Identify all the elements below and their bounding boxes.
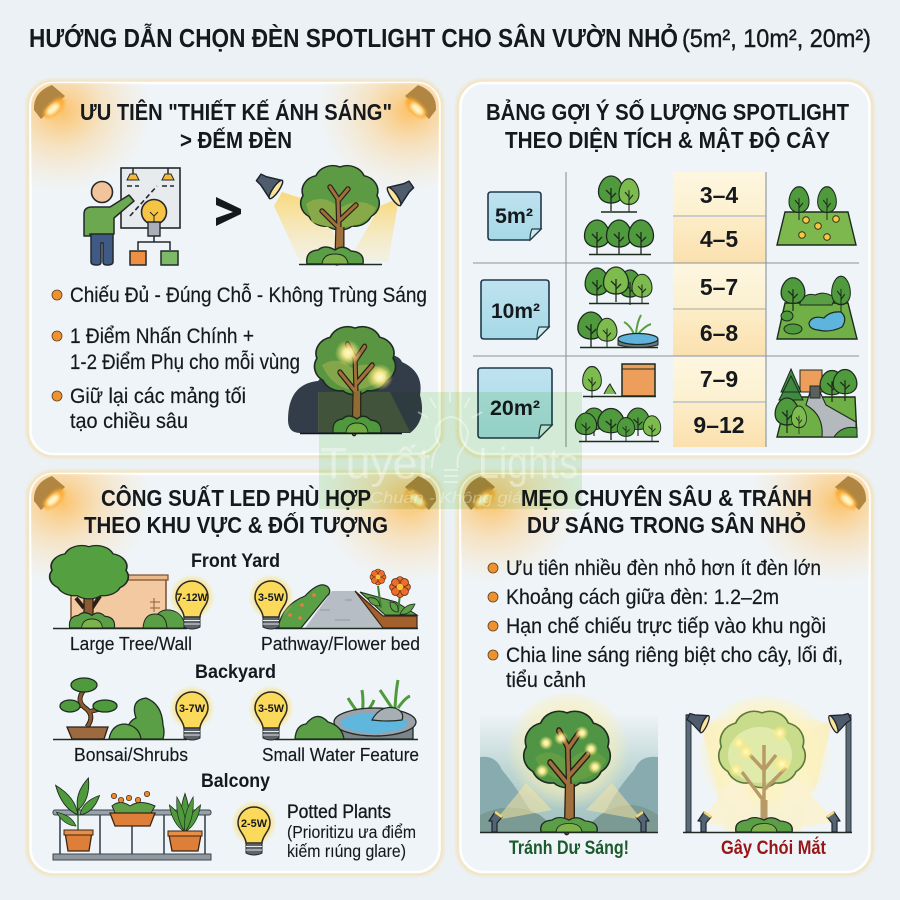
corner spotlights	[31, 474, 439, 574]
scene: bonsai and shrubs	[53, 678, 215, 765]
scene: balcony potted plants	[52, 777, 211, 860]
title: HƯỚNG DẪN CHỌN ĐÈN SPOTLIGHT CHO SÂN VƯỜN NHỎ	[29, 23, 678, 53]
quantity column: 4–5	[700, 226, 738, 252]
icon: tree lit by two spotlights	[252, 166, 418, 264]
bulb and note: potted plants: kiếm rıúng glare)	[287, 841, 406, 861]
scene: large tree and wall	[50, 546, 215, 654]
label: balcony: Balcony	[201, 771, 270, 792]
title: (5m², 10m², 20m²)	[682, 25, 871, 53]
illustration: glare	[683, 696, 854, 859]
quantity column: 7–9	[700, 366, 738, 392]
tree density icons: 10 m2	[578, 267, 658, 348]
bullet: accent points: 1 Điểm Nhấn Chính +	[70, 324, 254, 348]
illustration: avoid excess light: Tránh Dư Sáng!	[509, 838, 629, 859]
heading	[80, 98, 392, 153]
panel: lighting design priority	[24, 78, 446, 460]
panel: spotlight quantity table	[458, 81, 872, 456]
heading: CÔNG SUẤT LED PHÙ HỢP	[101, 484, 371, 511]
watermark: Tuyết Lights	[319, 392, 582, 509]
watermark: Tuyết Lights: Chuẩn - Không giá	[370, 489, 522, 507]
area card 10 m2	[481, 280, 549, 339]
bulb and note: potted plants: Potted Plants	[287, 802, 391, 823]
bulb and note: potted plants: (Prioritizu ưa điểm	[287, 822, 416, 842]
quantity column	[673, 172, 766, 447]
bulb and note: potted plants: 2-5W	[241, 818, 268, 830]
lawn scene: 20 m2	[775, 369, 857, 437]
label: front yard: Front Yard	[191, 551, 280, 572]
watermark: Tuyết Lights: Lights	[478, 439, 578, 488]
area card 20 m2	[478, 368, 552, 438]
bullet: accent points	[52, 324, 300, 374]
scene: bonsai and shrubs: 3-7W	[179, 703, 206, 715]
area card 5 m2	[488, 192, 541, 240]
heading	[84, 484, 388, 538]
tips list: Chia line sáng riêng biệt cho cây, lối đi,	[506, 643, 843, 667]
scene: large tree and wall: 7-12W	[176, 592, 208, 604]
bullet: dark areas	[52, 384, 246, 433]
scene: large tree and wall: Large Tree/Wall	[70, 633, 192, 654]
lawn scene: 5 m2	[777, 187, 856, 245]
panel: expert tips	[454, 468, 876, 878]
heading: > ĐẾM ĐÈN	[180, 126, 292, 153]
scene: pathway and flower bed: Pathway/Flower bed	[261, 633, 420, 654]
scene: small water feature	[248, 680, 419, 765]
illustration: glare: Gây Chói Mắt	[721, 837, 827, 859]
illustration: avoid excess light	[480, 693, 658, 859]
watermark: Tuyết Lights: Tuyết	[320, 439, 430, 488]
heading	[486, 97, 850, 153]
tips list	[488, 556, 843, 692]
scene: small water feature: Small Water Feature	[262, 744, 419, 765]
heading: MẸO CHUYÊN SÂU & TRÁNH	[521, 484, 812, 511]
greater-than sign	[216, 197, 241, 226]
corner spotlights	[461, 474, 869, 574]
heading	[521, 484, 812, 538]
quantity column: 9–12	[693, 412, 745, 438]
area card 10 m2: 10m²	[491, 300, 540, 323]
heading: BẢNG GỢI Ý SỐ LƯỢNG SPOTLIGHT	[486, 97, 850, 125]
icon: person planning light at board	[84, 168, 180, 265]
scene: bonsai and shrubs: Bonsai/Shrubs	[74, 744, 188, 765]
heading: DƯ SÁNG TRONG SÂN NHỎ	[527, 510, 806, 538]
scene: pathway and flower bed: 3-5W	[258, 592, 285, 604]
heading: ƯU TIÊN "THIẾT KẾ ÁNH SÁNG"	[80, 98, 392, 125]
bullet: accent points: 1-2 Điểm Phụ cho mỗi vùng	[70, 349, 300, 374]
panel: LED wattage	[24, 468, 446, 878]
bullet: dark areas: tạo chiều sâu	[70, 409, 188, 433]
bullet: dark areas: Giữ lại các mảng tối	[70, 384, 246, 408]
tips list: tiểu cảnh	[506, 668, 586, 692]
scene: small water feature: 3-5W	[258, 703, 285, 715]
lawn scene: 10 m2	[777, 276, 857, 339]
corner spotlights	[31, 83, 439, 184]
tips list: Hạn chế chiếu trực tiếp vào khu ngồi	[506, 614, 826, 638]
tree density icons: 20 m2	[575, 364, 661, 442]
bulb and note: potted plants	[231, 800, 416, 861]
heading: THEO KHU VỰC & ĐỐI TƯỢNG	[84, 511, 388, 538]
label: backyard: Backyard	[195, 662, 276, 683]
tips list: Ưu tiên nhiều đèn nhỏ hơn ít đèn lớn	[506, 556, 821, 580]
quantity column: 6–8	[700, 320, 738, 346]
area card 5 m2: 5m²	[495, 205, 533, 228]
tips list: Khoảng cách giữa đèn: 1.2–2m	[506, 585, 779, 609]
quantity column: 5–7	[700, 274, 738, 300]
heading: THEO DIỆN TÍCH & MẬT ĐỘ CÂY	[505, 126, 830, 153]
scene: pathway and flower bed	[248, 569, 420, 654]
area card 20 m2: 20m²	[490, 397, 540, 420]
icon: tree with dark background	[288, 327, 422, 434]
quantity column: 3–4	[700, 182, 738, 208]
bullet: coverage: Chiếu Đủ - Đúng Chỗ - Không Trùng Sáng	[70, 282, 427, 307]
tree density icons: 5 m2	[584, 176, 654, 255]
